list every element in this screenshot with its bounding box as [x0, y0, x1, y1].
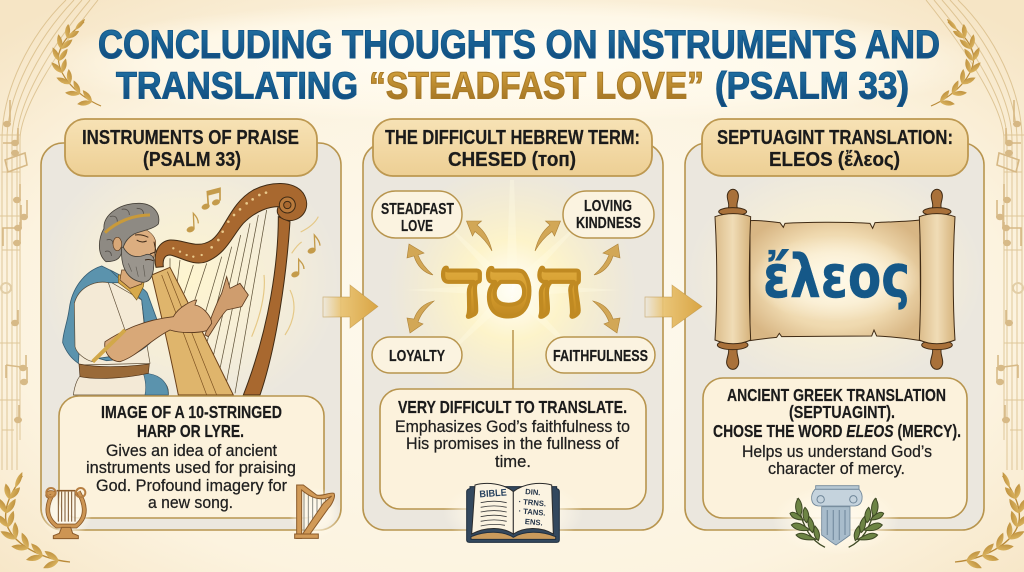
pill: steadfast love — [372, 191, 462, 238]
section header: Septuagint translation: ELEOS (ἔλεος) — [769, 149, 900, 171]
pill: loving kindness: LOVING — [584, 198, 632, 215]
icon: open Bible: BIBLE — [479, 487, 508, 500]
man: facial features — [135, 235, 156, 261]
man: headband — [105, 215, 150, 233]
icon: open Bible — [443, 478, 583, 548]
section header: instruments of praise: (PSALM 33) — [143, 149, 241, 171]
man: near arm and hand — [105, 300, 212, 362]
sound motion lines — [252, 217, 318, 337]
text box: eleos description: Helps us understand God’s — [742, 442, 932, 461]
icon: open Bible: · TANS. — [518, 506, 546, 518]
text box: harp description: Gives an idea of ancient — [106, 441, 277, 460]
man: lower robe — [73, 373, 168, 395]
section header: Septuagint translation — [702, 119, 968, 176]
text box: harp description — [59, 396, 324, 518]
man: sleeve — [74, 282, 125, 362]
panel 2 background — [363, 143, 663, 530]
title: “STEADFAST LOVE” — [369, 66, 704, 108]
man: face — [122, 227, 156, 275]
connector line — [512, 330, 514, 389]
music notes — [186, 188, 320, 278]
text box: harp description: God. Profound imagery for — [96, 476, 287, 495]
section header: instruments of praise: INSTRUMENTS OF PRAISE — [82, 127, 299, 149]
text box: chesed description: Emphasizes God’s faithfulness to — [395, 417, 630, 436]
man: far arm and hand — [205, 277, 248, 337]
panel: Septuagint translation — [685, 143, 984, 555]
harp sound box — [152, 267, 233, 395]
icon: lyre — [40, 487, 92, 539]
pill: loving kindness: KINDNESS — [576, 215, 641, 232]
text box: chesed description: time. — [495, 452, 531, 471]
harp strings — [170, 210, 267, 393]
section header: the difficult Hebrew term — [373, 119, 652, 176]
scroll Greek word: ἔλεος — [763, 242, 910, 312]
illustration: David playing the harp — [63, 184, 320, 395]
parchment sheet — [750, 220, 921, 341]
section header: instruments of praise — [65, 119, 317, 176]
text box: eleos description: ANCIENT GREEK TRANSLATION — [727, 385, 946, 405]
illustration: parchment scroll — [715, 189, 955, 369]
Hebrew word chesed: חסד — [442, 243, 585, 334]
decoration: left music staff — [0, 0, 98, 470]
icon: open Bible: ENS. — [524, 517, 543, 528]
light rays behind the word — [405, 180, 620, 367]
text box: eleos description: (SEPTUAGINT). — [789, 402, 895, 422]
arrow: panel 2 to panel 3 — [645, 285, 702, 328]
scroll knobs — [717, 189, 952, 369]
pill: loyalty: LOYALTY — [389, 348, 445, 365]
curved arrows radiating from the word — [407, 221, 620, 333]
panel 3 background — [685, 143, 984, 530]
arrow: panel 1 to panel 2 — [323, 285, 378, 328]
pill: faithfulness — [546, 337, 655, 373]
section header: the difficult Hebrew term: THE DIFFICULT HEBREW TERM: — [385, 127, 640, 149]
pill: steadfast love: LOVE — [401, 218, 433, 235]
icon: Greek column with olive branches — [773, 485, 899, 555]
pill: loyalty — [372, 337, 462, 373]
text box: chesed description: His promises in the fullness of — [406, 434, 619, 453]
text box: harp description: HARP OR LYRE. — [137, 421, 244, 441]
man: hair — [99, 203, 159, 262]
harp column — [243, 217, 290, 395]
pill: steadfast love: STEADFAST — [381, 201, 454, 218]
text box: eleos description: character of mercy. — [768, 459, 905, 478]
icon: small harp — [289, 485, 341, 539]
man: neck and collar — [118, 275, 145, 300]
decoration: bottom-right laurel — [955, 465, 1024, 572]
decoration: bottom-left laurel — [0, 465, 70, 572]
decoration: top-left laurel — [50, 18, 101, 107]
section header: the difficult Hebrew term: CHESED (топ) — [448, 149, 576, 171]
icon: open Bible: · TRNS. — [518, 497, 546, 508]
pill: faithfulness: FAITHFULNESS — [553, 348, 648, 365]
man: beard — [121, 247, 154, 282]
harp neck — [155, 184, 307, 267]
decoration: right music staff — [926, 0, 1024, 470]
text box: harp description: IMAGE OF A 10-STRINGED — [101, 402, 282, 422]
text box: chesed description: VERY DIFFICULT TO TRANSLATE. — [398, 397, 627, 417]
text box: eleos description — [703, 378, 967, 518]
text box: harp description: instruments used for praising — [86, 458, 296, 477]
man: belt — [79, 364, 149, 378]
panel: the difficult Hebrew term — [363, 143, 663, 548]
text box: eleos description: CHOSE THE WORD ELEOS (MERCY). — [713, 421, 961, 441]
section header: Septuagint translation: SEPTUAGINT TRANSLATION: — [717, 127, 953, 149]
text box: chesed description — [380, 389, 646, 509]
man: blue mantle — [63, 266, 127, 363]
panel: instruments of praise — [40, 143, 341, 539]
pill: loving kindness — [563, 191, 654, 238]
decoration: top-right laurel — [931, 18, 982, 107]
title: TRANSLATING — [116, 66, 358, 108]
title: (PSALM 33) — [715, 66, 909, 108]
icon: open Bible: DIN. — [525, 487, 541, 497]
text box: harp description: a new song. — [148, 493, 233, 512]
title — [98, 23, 940, 108]
man: tunic — [73, 280, 150, 365]
panel 1 background — [41, 143, 341, 530]
scroll rollers — [715, 214, 751, 344]
